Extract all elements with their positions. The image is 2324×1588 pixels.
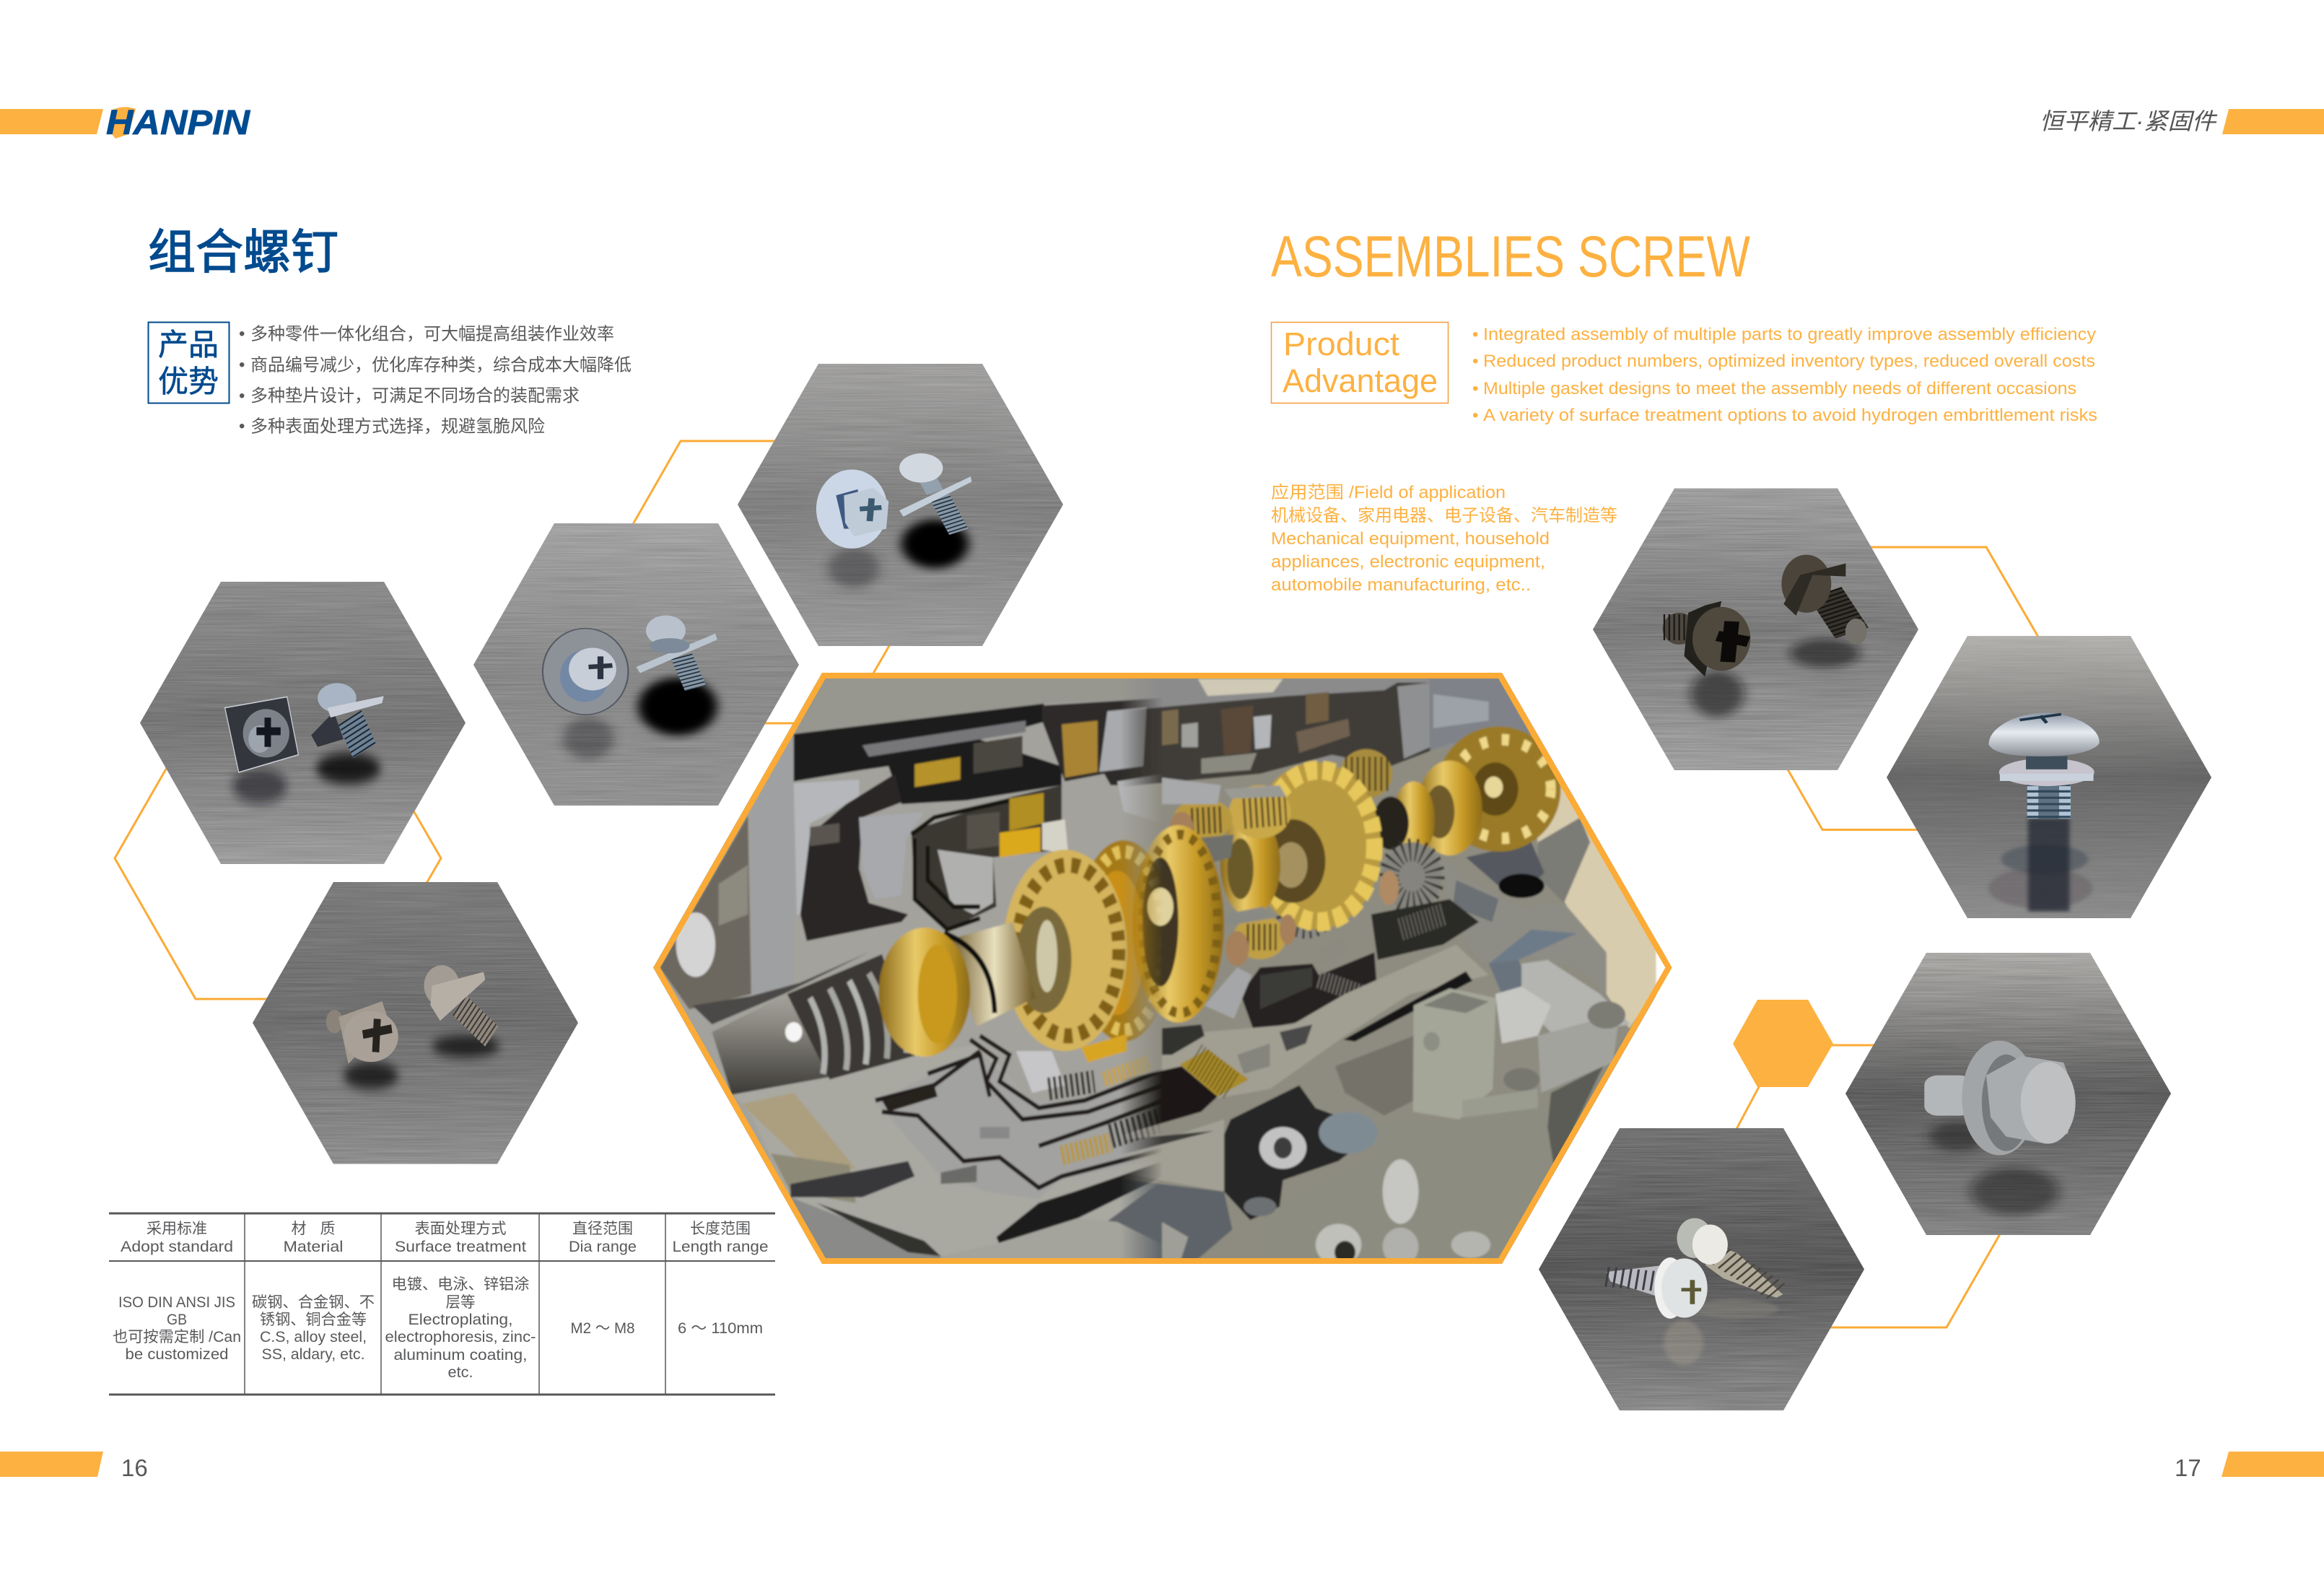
table column: length range: 6 ～ 110mm [678, 1320, 763, 1337]
table column: dia range: Dia range [569, 1239, 637, 1255]
advantages list: Chinese: 多种零件一体化组合，可大幅提高组装作业效率 [250, 325, 614, 344]
product advantage box: Chinese [149, 322, 230, 403]
title: English: ASSEMBLIES SCREW [1271, 224, 1750, 289]
title: Chinese: 组合螺钉 [148, 225, 338, 279]
helical gears [1383, 842, 1441, 910]
field of application text [1271, 483, 1617, 595]
table column: adopt standard: GB [167, 1312, 187, 1328]
table column: material: SS, aldary, etc. [261, 1346, 365, 1363]
advantages list: Chinese: • [239, 324, 245, 344]
header right orange bar [2222, 109, 2324, 134]
advantages list: Chinese: 多种表面处理方式选择，规避氢脆风险 [250, 417, 545, 436]
photo hexagon: hex bolt with washers [1840, 949, 2176, 1238]
table column: material: 材 质 [292, 1221, 335, 1237]
connector: hexagon outline right [1741, 547, 2068, 830]
table column: adopt standard: 也可按需定制 /Can [113, 1329, 241, 1345]
header left orange bar [0, 109, 103, 134]
table column: material [252, 1221, 375, 1363]
main photo hexagon: gearbox cutaway [650, 668, 1678, 1268]
specification table [109, 1213, 775, 1395]
field of application text: 应用范围 /Field of application [1271, 483, 1506, 502]
table column: surface treatment: Surface treatment [395, 1239, 526, 1255]
table column: surface treatment: electrophoresis, zinc- [385, 1329, 536, 1345]
table column: adopt standard [113, 1221, 241, 1363]
field of application text: automobile manufacturing, etc.. [1271, 575, 1531, 595]
table column: adopt standard: be customized [126, 1346, 228, 1363]
footer left orange bar [0, 1452, 103, 1477]
table column: surface treatment: 表面处理方式 [414, 1221, 507, 1237]
pocket with screw [1223, 1084, 1348, 1221]
footer right orange bar [2222, 1452, 2324, 1477]
product advantage box: Chinese: 优势 [158, 365, 219, 398]
table column: surface treatment [385, 1221, 536, 1381]
table column: adopt standard: 采用标准 [147, 1221, 207, 1237]
table column: surface treatment: aluminum coating, [394, 1347, 527, 1364]
field of application text: appliances, electronic equipment, [1271, 552, 1545, 572]
advantages list: English [1472, 325, 2097, 425]
table column: material: 碳钢、合金钢、不 [252, 1294, 375, 1311]
advantages list: English: Reduced product numbers, optimized inventory types, reduced overall costs [1483, 352, 2095, 371]
table column: dia range [569, 1221, 637, 1337]
connector [1413, 988, 1496, 1120]
lower left castings [732, 1044, 1163, 1268]
photo hexagon: square-washer screws [137, 577, 469, 866]
table column: adopt standard: Adopt standard [121, 1239, 233, 1255]
connector: hexagon outline centre [600, 441, 926, 723]
advantages list: Chinese: • [239, 386, 245, 406]
advantages list: English: Multiple gasket designs to meet the assembly needs of different occasions [1483, 379, 2076, 398]
advantages list: Chinese: • [239, 416, 245, 436]
advantages list: English: • [1472, 406, 1478, 425]
photo hexagon: round washer screws [469, 520, 801, 808]
table column: length range: Length range [673, 1239, 768, 1255]
photo hexagon: nickel screws [249, 877, 581, 1166]
connector: small hexagon to screw [1736, 1086, 1760, 1130]
page number 17: 17 [2175, 1454, 2201, 1481]
bottom left of right half [1133, 1120, 1226, 1192]
end bearing gold [1436, 726, 1560, 852]
clutch ring at image centre [1132, 825, 1224, 1023]
header slogan: 恒平精工·紧固件 [2040, 108, 2218, 134]
upper right casting and cream backdrop [1532, 728, 1675, 1029]
lower right housing [1254, 1032, 1630, 1268]
table column: adopt standard: ISO DIN ANSI JIS [118, 1294, 235, 1311]
advantages list: English: • [1472, 325, 1478, 344]
table column: dia range: 直径范围 [572, 1221, 633, 1237]
dark mechanism under gears [1241, 952, 1378, 1030]
table column: surface treatment: Electroplating, [409, 1312, 512, 1328]
table column: surface treatment: 层等 [446, 1294, 475, 1311]
gearbox right half [1096, 671, 1675, 1268]
page number 16: 16 [121, 1454, 148, 1481]
table column: material: 锈钢、铜合金等 [260, 1312, 367, 1328]
table column: material: Material [283, 1239, 344, 1255]
advantages list: English: Integrated assembly of multiple parts to greatly improve assembly efficiency [1483, 325, 2096, 344]
table column: surface treatment: 电镀、电泳、锌铝涂 [391, 1276, 530, 1293]
field of application text: Mechanical equipment, household [1271, 529, 1550, 549]
advantages list: Chinese [239, 324, 632, 436]
table column: dia range: M2 ～ M8 [570, 1320, 635, 1337]
connector: hexagon outline left [115, 717, 441, 999]
photo hexagon: dark phosphate screws [1588, 484, 1923, 772]
table column: material: C.S, alloy steel, [260, 1329, 367, 1345]
advantages list: Chinese: 商品编号减少，优化库存种类，综合成本大幅降低 [250, 355, 632, 375]
table column: surface treatment: etc. [447, 1364, 473, 1381]
advantages list: English: A variety of surface treatment options to avoid hydrogen embrittlement risks [1483, 406, 2097, 425]
product advantage box: English: Product [1283, 326, 1400, 362]
bronze barrel and O-ring [944, 922, 1036, 1026]
product advantage box: English [1272, 322, 1448, 403]
gold clutch rings [1093, 839, 1161, 1042]
input shaft [712, 1003, 829, 1096]
housing strip [1162, 945, 1488, 1099]
decorative solid hexagon [1733, 1000, 1833, 1087]
advantages list: Chinese: • [239, 355, 245, 375]
logo: HANPIN: HANPIN [106, 104, 250, 142]
photo hexagon: hex head screws [733, 361, 1065, 650]
gearbox left half [653, 671, 1173, 1268]
photo hexagon: tapping screws [1534, 1125, 1869, 1413]
product advantage box: English: Advantage [1283, 362, 1438, 399]
advantages list: English: • [1472, 379, 1478, 398]
connector: bolt to screw [1826, 1233, 2001, 1327]
advantages list: English: • [1472, 352, 1478, 371]
table column: length range: 长度范围 [690, 1221, 751, 1237]
photo hexagon: mushroom head screw [1884, 632, 2216, 920]
product advantage box: Chinese: 产品 [158, 328, 219, 362]
table column: length range [673, 1221, 768, 1337]
field of application text: 机械设备、家用电器、电子设备、汽车制造等 [1271, 506, 1617, 525]
advantages list: Chinese: 多种垫片设计，可满足不同场合的装配需求 [250, 386, 580, 406]
connector: small hexagon to bolt [1832, 1044, 1877, 1047]
